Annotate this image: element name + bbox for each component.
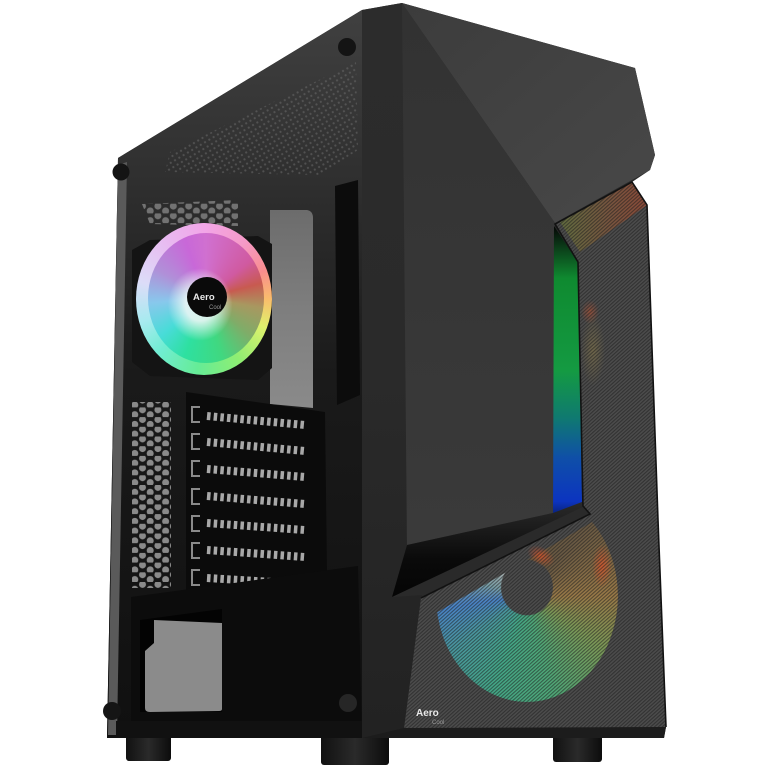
panel: front main facet bbox=[402, 3, 555, 545]
foot: centre bbox=[321, 734, 389, 765]
foot: right bbox=[553, 734, 602, 762]
front bottom band bbox=[362, 727, 666, 738]
icon: upper RGB fan bbox=[136, 223, 272, 375]
screw: top right bbox=[338, 38, 356, 56]
front logo: Aero bbox=[416, 708, 439, 719]
shroud base bbox=[116, 721, 364, 738]
mesh glow streak bbox=[581, 314, 605, 386]
top honeycomb vent bbox=[142, 200, 238, 226]
expansion slot rows bbox=[207, 416, 305, 584]
mesh glow spot bbox=[581, 300, 599, 324]
interior dark channel bbox=[335, 180, 360, 405]
screw: top left bbox=[112, 164, 130, 180]
graphics card bbox=[270, 210, 313, 408]
panel: glass side bbox=[107, 10, 364, 738]
PSU window frame bbox=[140, 609, 222, 712]
left honeycomb vent bbox=[132, 402, 171, 588]
fan hole orange glow bbox=[524, 541, 558, 571]
case silhouette backing bbox=[107, 3, 666, 738]
fan hub bbox=[187, 277, 227, 317]
mesh texture bbox=[404, 182, 666, 729]
RGB light strip bbox=[553, 226, 582, 516]
front logo sub: Cool bbox=[432, 720, 444, 726]
mesh base bbox=[404, 182, 666, 729]
screw: bottom right bbox=[339, 694, 357, 712]
panel: front upper facet bbox=[402, 3, 655, 223]
foot: left bbox=[126, 734, 171, 761]
mesh edge bbox=[421, 182, 666, 727]
hub logo: Aero bbox=[193, 292, 215, 303]
panel: corner pillar bbox=[362, 3, 422, 738]
fan blades bbox=[148, 233, 264, 363]
panel: front mesh bbox=[404, 182, 666, 729]
mesh top tint bbox=[560, 182, 647, 252]
slot hooks bbox=[192, 407, 200, 585]
hub logo sub: Cool bbox=[209, 305, 221, 311]
screw: bottom left bbox=[103, 702, 121, 720]
glass edge highlight bbox=[108, 162, 127, 735]
fan frame: upper fan bbox=[132, 236, 272, 380]
expansion slot plate bbox=[186, 392, 327, 598]
underside of front panel bbox=[392, 502, 583, 597]
fan ring red glow bbox=[592, 544, 612, 588]
PSU window bbox=[145, 620, 222, 712]
fan outer ring bbox=[136, 223, 272, 375]
PSU shroud bbox=[131, 566, 362, 738]
top mesh vent bbox=[165, 62, 358, 175]
lower RGB fan glow bbox=[437, 522, 618, 702]
